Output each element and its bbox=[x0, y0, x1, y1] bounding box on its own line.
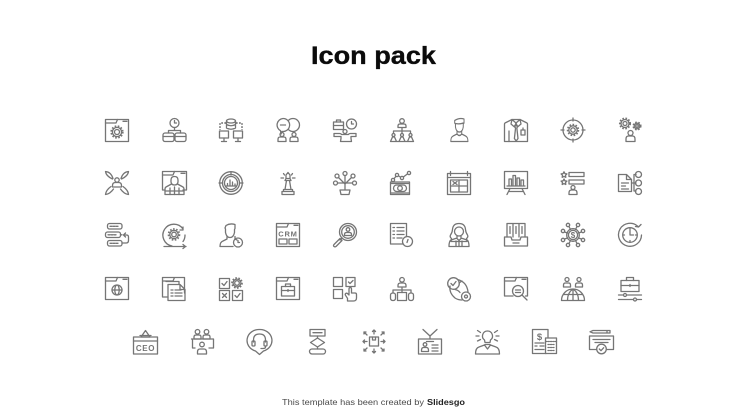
icon: checklist with clock bbox=[390, 224, 412, 246]
icon: clock hierarchy bbox=[163, 118, 186, 142]
icon: CEO sign: CEO bbox=[136, 344, 155, 353]
icon: magnifier with person bbox=[334, 224, 356, 247]
icon: stacked windows and document bbox=[162, 278, 185, 300]
icon: briefcase with sliders bbox=[618, 278, 642, 301]
icon: meeting desk bbox=[192, 330, 214, 354]
icon: woman portrait bbox=[449, 224, 469, 246]
icon: idea person bbox=[476, 330, 500, 354]
footer credit: This template has been created by bbox=[282, 398, 425, 407]
icon: database with monitors bbox=[220, 119, 242, 142]
icon: box with arrows bbox=[363, 330, 385, 353]
icon: window with briefcase bbox=[276, 278, 300, 300]
footer credit: Slidesgo bbox=[427, 398, 465, 407]
icon: linked list steps bbox=[106, 224, 128, 246]
icon: headset pin bbox=[247, 329, 272, 354]
icon grid bbox=[106, 118, 642, 354]
icon: window with globe bbox=[106, 278, 128, 300]
icon: clock cycle bbox=[619, 223, 642, 246]
icon: checkboxes and gear bbox=[220, 278, 242, 300]
icon: grid with touch hand bbox=[334, 278, 356, 301]
icon: globe connection with pins bbox=[448, 278, 470, 301]
icon: ID badge bbox=[418, 330, 442, 354]
title: Icon pack bbox=[311, 42, 436, 70]
icon: window with magnifier bbox=[504, 278, 528, 300]
icon: presentation board bbox=[504, 172, 528, 194]
icon: chess piece bbox=[281, 172, 295, 194]
icon: invoice and calculator bbox=[532, 330, 556, 354]
icon: rating bars with person bbox=[561, 172, 584, 194]
icon: shirt and tie bbox=[504, 120, 528, 142]
icon: crossed pens with person bbox=[106, 172, 128, 194]
icon: invoice and calculator: $ bbox=[537, 332, 543, 343]
icon: man portrait bbox=[451, 118, 468, 142]
icon: file binders bbox=[504, 224, 528, 246]
footer credit bbox=[282, 398, 465, 407]
icon: dollar network bbox=[561, 223, 585, 247]
icon: certificate with pencil bbox=[590, 330, 614, 354]
icon: gear cycle bbox=[163, 224, 186, 248]
icon: hierarchy with person bbox=[390, 278, 414, 300]
icon: gears and person bbox=[620, 118, 641, 142]
icon: person with briefcase and clock bbox=[334, 119, 356, 142]
icon: two people talking bbox=[277, 118, 300, 142]
icon: window with presenter bbox=[162, 172, 186, 194]
icon: CEO sign bbox=[134, 330, 158, 354]
icon: document with nodes bbox=[618, 172, 642, 194]
icon: man with clock bbox=[220, 224, 242, 247]
icon: plant network bbox=[334, 172, 356, 194]
icon: CRM window bbox=[276, 224, 300, 246]
icon: circular chart bbox=[219, 172, 243, 194]
icon: org chart of people bbox=[390, 119, 414, 142]
icon: window with gear bbox=[106, 120, 128, 142]
icon: flowchart bbox=[310, 330, 326, 354]
icon: money with trend bbox=[390, 171, 411, 194]
icon: dollar network: $ bbox=[571, 231, 576, 240]
icon: people on globe bbox=[562, 278, 584, 300]
icon: CRM window: CRM bbox=[278, 230, 298, 238]
icon: target gear bbox=[561, 118, 585, 142]
icon: calendar bbox=[448, 172, 470, 194]
